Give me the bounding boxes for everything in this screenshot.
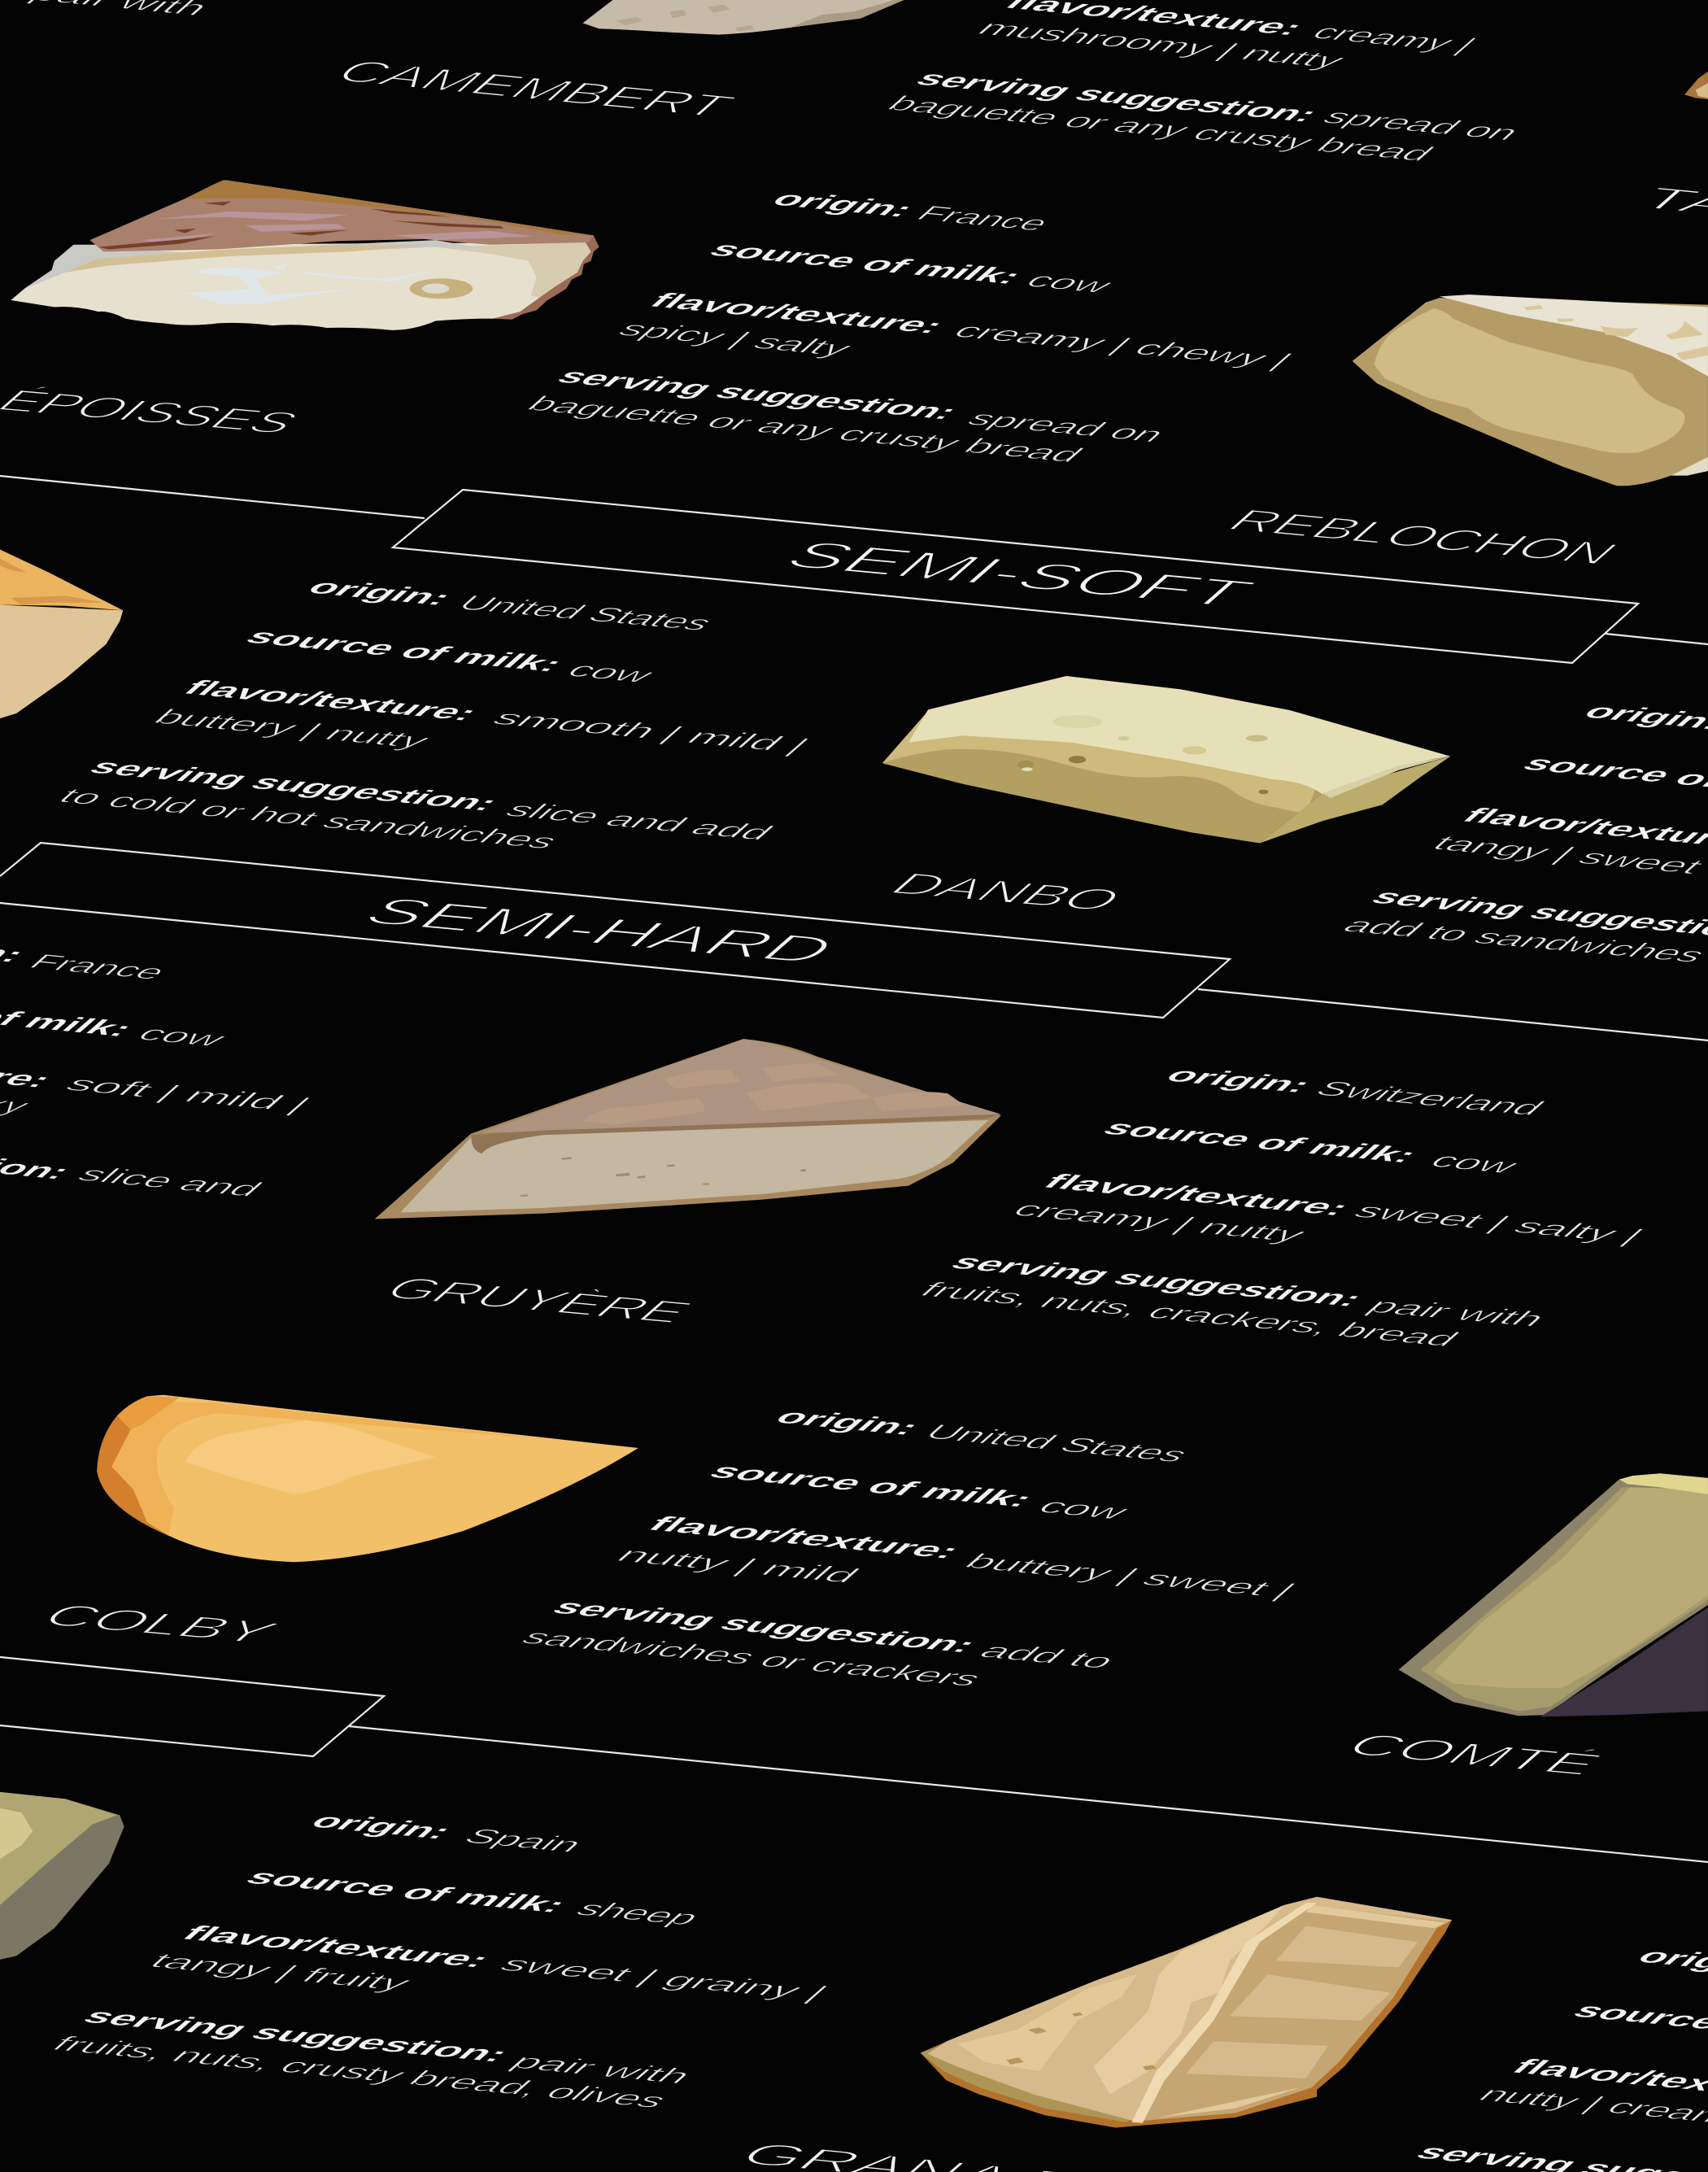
origin: origin:: [765, 187, 922, 221]
flavor and texture: smooth | mild |: [485, 706, 817, 757]
source of milk: source of milk:: [238, 625, 571, 676]
flavor and texture: flavor/texture:: [641, 1512, 968, 1563]
cheese name: DANBO: [879, 866, 1134, 917]
panel: left block (Spain): [0, 1792, 835, 2113]
flavor and texture: nutty | mild: [609, 1543, 867, 1587]
origin: [300, 575, 721, 635]
origin: origin:: [303, 1809, 460, 1843]
serving suggestion: to cold or hot sandwiches: [51, 784, 566, 853]
panel: Colby: [31, 1395, 1303, 1690]
serving suggestion: sandwiches or crackers: [514, 1625, 990, 1690]
cheese name: GRUYÈRE: [373, 1271, 703, 1329]
source of milk: [702, 1459, 1137, 1524]
panel: Camembert: [325, 0, 1527, 165]
serving suggestion: [45, 2004, 699, 2113]
origin: origin:: [1576, 700, 1708, 734]
origin: [768, 1405, 1196, 1467]
source of milk: cow: [560, 658, 662, 687]
source of milk: [1096, 1116, 1527, 1178]
origin: [1158, 1063, 1552, 1120]
section header: SEMI-SOFT: SEMI-SOFT: [771, 534, 1267, 614]
serving suggestion: slice and add: [498, 798, 781, 844]
source of milk: [238, 625, 662, 687]
flavor and texture: flavor/texture:: [1036, 1170, 1357, 1220]
flavor and texture: flavor/texture:: [175, 1921, 498, 1972]
icon: monterey jack cheese: [0, 549, 123, 718]
source of milk: [702, 238, 1121, 298]
flavor and texture: creamy |: [1305, 20, 1484, 57]
source of milk: cow: [130, 1022, 234, 1051]
source of milk: cow: [1423, 1149, 1527, 1178]
source of milk: sheep: [569, 1897, 708, 1930]
serving suggestion: [51, 755, 781, 853]
source of milk: source of milk:: [702, 238, 1030, 289]
serving suggestion: add to sandwiches: [1335, 914, 1708, 967]
flavor and texture: [0, 1043, 318, 1118]
serving suggestion: [880, 67, 1527, 165]
flavor and texture: [142, 1921, 835, 2004]
panel: Comté: [1335, 1473, 1708, 1782]
origin: Switzerland: [1308, 1077, 1552, 1120]
serving suggestion: serving suggestion:: [943, 1250, 1370, 1311]
section header: SEMI-HARD: SEMI-HARD: [350, 890, 851, 971]
flavor and texture: [1471, 2055, 1708, 2130]
serving suggestion: [514, 1595, 1123, 1690]
flavor and texture: buttery | nutty: [146, 705, 438, 752]
panel: left cheese (United States, semi-soft): [0, 549, 817, 853]
flavor and texture: [611, 289, 1300, 373]
serving suggestion: slice and: [70, 1162, 270, 1201]
serving suggestion: pair with: [503, 2050, 699, 2088]
serving suggestion: serving suggestion:: [1364, 885, 1708, 944]
source of milk: [238, 1865, 708, 1930]
serving suggestion: serving suggestion:: [550, 364, 965, 424]
serving suggestion: serving suggestion:: [545, 1595, 984, 1657]
serving suggestion: serving suggestion:: [76, 2004, 516, 2066]
icon: manchego cheese: [0, 1792, 124, 1960]
source of milk: source of milk:: [238, 1865, 574, 1917]
origin: United States: [917, 1420, 1196, 1467]
source of milk: cow: [1018, 268, 1121, 298]
flavor and texture: [1005, 1170, 1651, 1248]
origin: [303, 1809, 590, 1857]
serving suggestion: baguette or any crusty bread: [520, 392, 1091, 467]
flavor and texture: flavor/texture:: [176, 676, 486, 725]
icon: grana padano cheese: [921, 1897, 1452, 2128]
serving suggestion: spread on: [960, 407, 1173, 447]
serving suggestion: baguette or any crusty bread: [880, 92, 1441, 165]
icon: camembert cheese fragment: [582, 0, 904, 35]
serving suggestion: fruits, nuts, crackers, bread: [913, 1278, 1466, 1351]
flavor and texture: [146, 676, 817, 757]
flavor and texture: [609, 1512, 1303, 1603]
serving suggestion: fruits, nuts, crusty bread, olives: [45, 2032, 675, 2113]
flavor and texture: sweet | grainy |: [492, 1952, 835, 2004]
origin: France: [909, 202, 1057, 235]
flavor and texture: sweet | salty |: [1346, 1199, 1651, 1248]
panel: right block (Grana Padano info): [1409, 1944, 1708, 2172]
cheese name: COLBY: [31, 1598, 289, 1649]
flavor and texture: flavor/texture:: [1455, 804, 1708, 853]
origin: origin:: [1158, 1063, 1319, 1097]
icon: époisses cheese: [11, 180, 599, 330]
flavor and texture: spicy | salty: [611, 317, 861, 360]
flavor and texture: flavor/texture:: [1505, 2055, 1708, 2104]
flavor and texture: mushroomy | nutty: [970, 16, 1353, 72]
origin: Spain: [456, 1825, 590, 1857]
panel: Grana Padano: [728, 1897, 1452, 2172]
panel: Époisses: [0, 180, 1300, 467]
cheese name: REBLOCHON: [1217, 503, 1629, 570]
serving suggestion: spread on: [1315, 105, 1527, 145]
flavor and texture: creamy | chewy |: [946, 319, 1300, 373]
source of milk: cow: [1030, 1494, 1137, 1524]
flavor and texture: [1425, 804, 1708, 879]
icon: reblochon cheese: [1353, 294, 1708, 486]
flavor and texture: tangy | sweet: [1425, 831, 1708, 879]
icon: taleggio cheese corner: [1684, 72, 1708, 99]
flavor and texture: nutty | creamy: [1471, 2083, 1708, 2130]
serving suggestion: pair with: [1360, 1294, 1553, 1331]
icon: gruyère cheese: [375, 1039, 1001, 1219]
flavor and texture: soft | mild |: [58, 1072, 318, 1117]
source of milk: source of milk:: [1096, 1116, 1425, 1167]
serving suggestion: add to: [972, 1639, 1123, 1673]
origin: origin:: [300, 575, 460, 610]
serving suggestion: [913, 1250, 1553, 1351]
cheese name: COMTÉ: [1335, 1727, 1613, 1782]
origin: [765, 187, 1057, 235]
panel: right block (Danbo neighbour): [1335, 700, 1708, 967]
panel: Reblochon: [1217, 294, 1708, 570]
icon: danbo cheese: [882, 676, 1450, 843]
serving suggestion: [520, 364, 1173, 467]
panel: left block (France, semi-hard): [0, 932, 318, 1201]
cheese name: CAMEMBERT: [325, 54, 745, 123]
origin: United States: [451, 591, 721, 635]
panel: Danbo: [879, 676, 1450, 917]
flavor and texture: tangy | fruity: [142, 1949, 420, 1995]
source of milk: [0, 990, 234, 1051]
flavor and texture: buttery | sweet |: [957, 1550, 1303, 1603]
section header: SEMI-SOFT: [0, 476, 1708, 663]
section header: SEMI-HARD: [0, 843, 1708, 1040]
icon: colby cheese: [97, 1395, 638, 1562]
source of milk: source of milk:: [702, 1459, 1041, 1511]
section header: HARD (box cropped at left): [0, 1657, 1708, 1862]
origin: France: [22, 950, 174, 984]
origin: origin:: [768, 1405, 927, 1440]
icon: comté cheese: [1399, 1473, 1708, 1716]
flavor and texture: [970, 0, 1484, 72]
serving suggestion: [1335, 885, 1708, 967]
panel: Taleggio: [1627, 72, 1708, 250]
flavor and texture: flavor/texture:: [643, 289, 952, 338]
flavor and texture: creamy | nutty: [1005, 1197, 1314, 1246]
panel: Gruyère: [373, 1039, 1651, 1351]
serving suggestion: serving suggestion:: [908, 67, 1326, 126]
serving suggestion: serving suggestion:: [82, 755, 506, 815]
